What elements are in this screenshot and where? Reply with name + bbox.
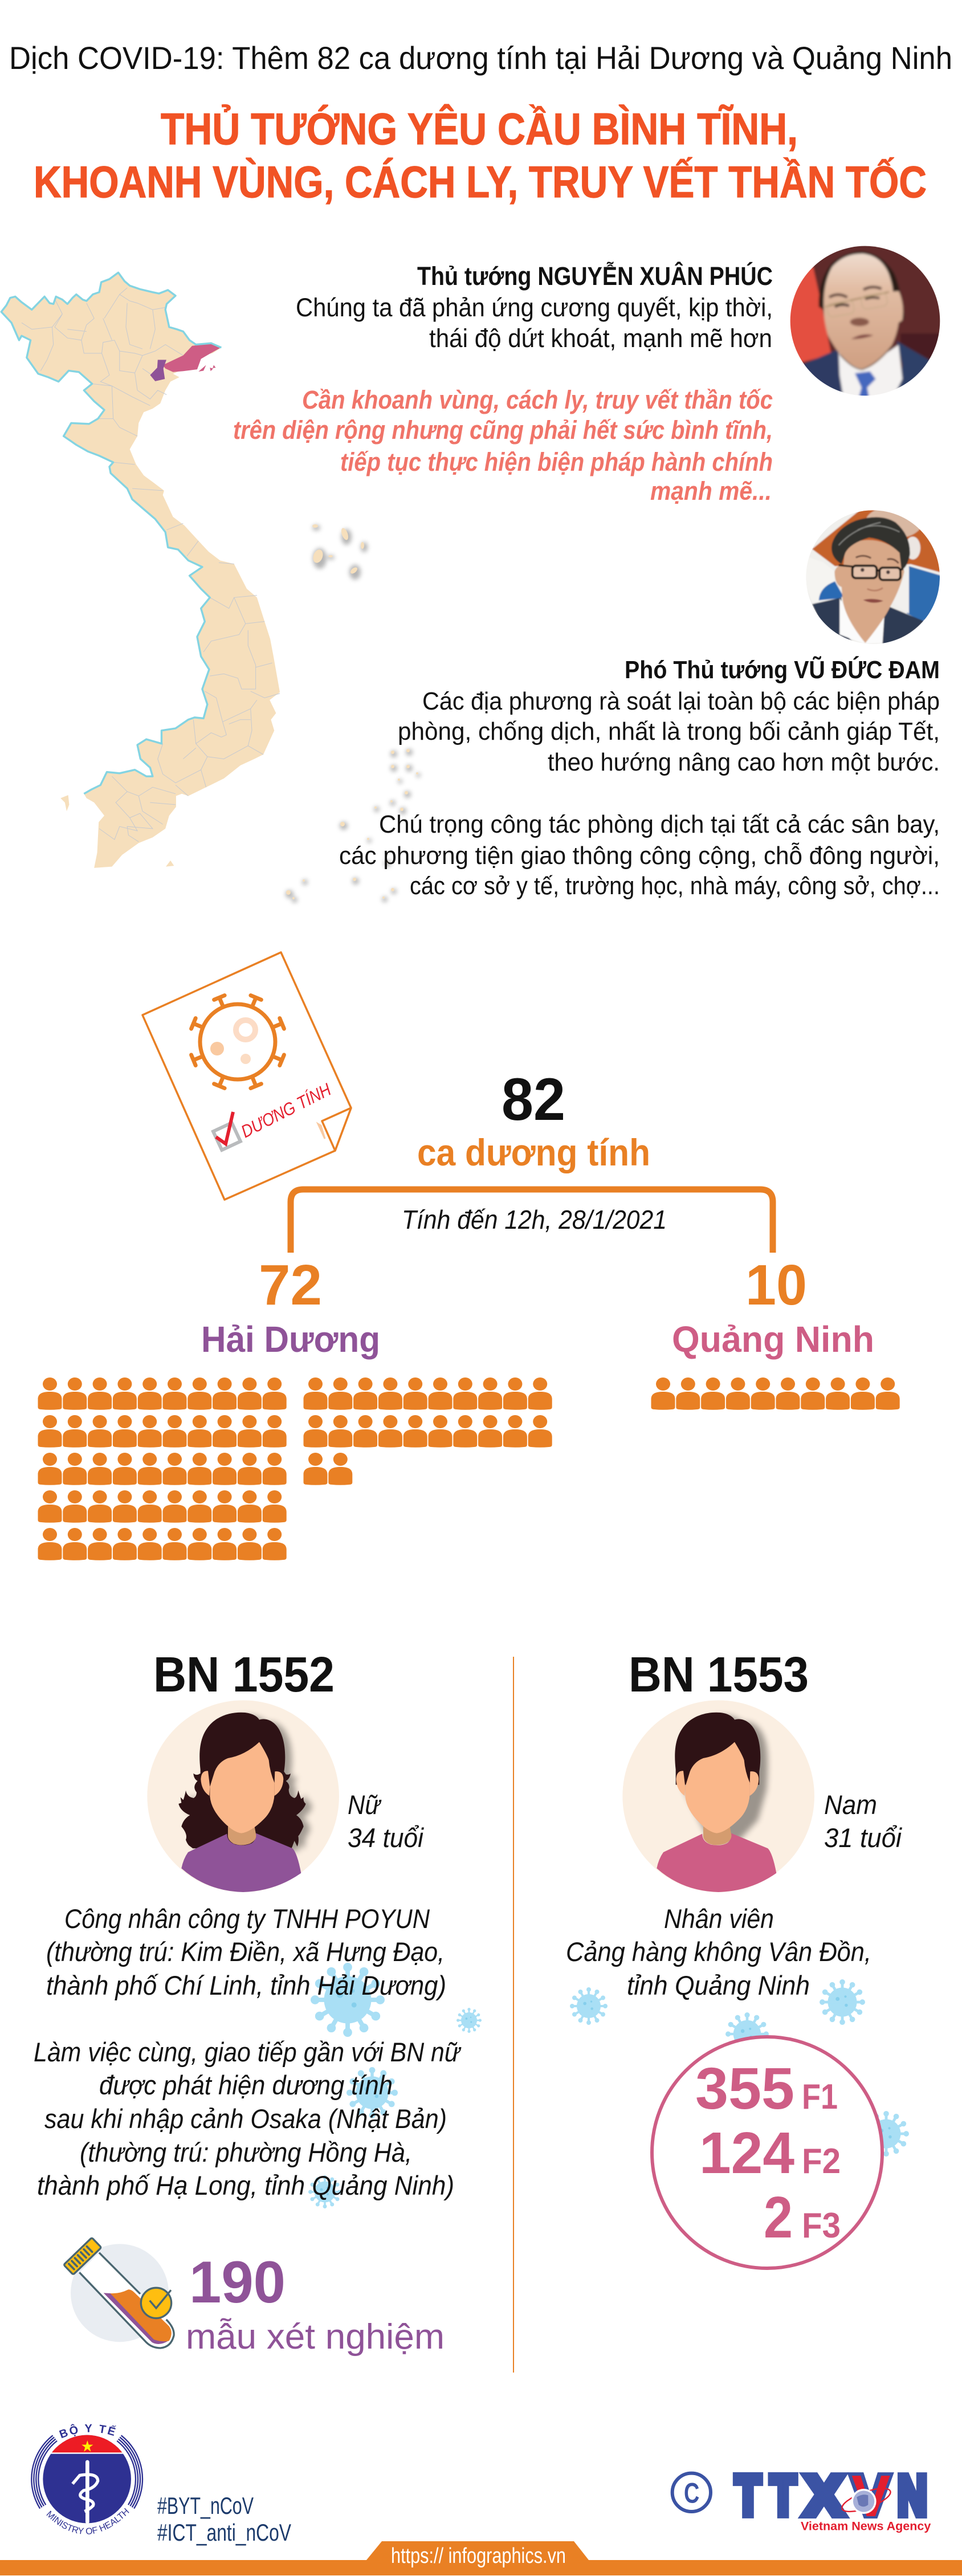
gender and age (824, 1790, 902, 1853)
occupation: (thường trú: Kim Điền, xã Hưng Đạo, (46, 1937, 445, 1967)
decorative viruses (308, 1963, 909, 2208)
icon: virus (191, 996, 284, 1088)
icon: test tube (64, 2237, 174, 2348)
map: Hai Duong highlighted (150, 360, 166, 381)
heading: BN 1552 (153, 1647, 335, 1702)
portrait: Vu Duc Dam (806, 510, 940, 644)
statement 1: Các địa phương rà soát lại toàn bộ các biện pháp (422, 687, 940, 715)
callout: contacts F1 F2 F3: F2 (802, 2142, 841, 2181)
quote: Prime Minister (233, 262, 773, 506)
heading: THỦ TƯỚNG YÊU CẦU BÌNH TĨNH, (161, 104, 798, 154)
exposure: (thường trú: phường Hồng Hà, (80, 2137, 412, 2167)
map: Quang Ninh highlighted (163, 343, 221, 372)
map: Phu Quoc and Con Dao islands (60, 795, 174, 867)
hashtags: #ICT_anti_nCoV (157, 2519, 291, 2546)
patient BN 1553 (566, 1647, 902, 2000)
highlighted quote: mạnh mẽ... (650, 476, 772, 506)
callout: contacts F1 F2 F3 (652, 2037, 882, 2268)
highlighted quote: Cần khoanh vùng, cách ly, truy vết thần tốc (302, 385, 773, 414)
statement 1: theo hướng nâng cao hơn một bước. (548, 748, 940, 776)
occupation (566, 1904, 871, 2000)
gender and age: Nữ (348, 1790, 382, 1820)
occupation: Nhân viên (664, 1904, 774, 1934)
statement 2 (339, 810, 940, 900)
map: Quang Ninh islets (198, 365, 216, 372)
logo: TTXVN: X (805, 2464, 843, 2526)
callout: contacts F1 F2 F3: 2 (764, 2184, 793, 2250)
count: Hai Duong: Hải Dương (201, 1319, 380, 1360)
occupation: Công nhân công ty TNHH POYUN (64, 1904, 430, 1934)
callout: contacts F1 F2 F3: F1 (802, 2077, 838, 2117)
gender and age: 34 tuổi (348, 1823, 424, 1853)
hashtags: #BYT_nCoV (157, 2492, 254, 2519)
map: land (1, 272, 280, 868)
logo: TTXVN: V (851, 2463, 890, 2529)
exposure (34, 2037, 462, 2200)
footer url: https:// infographics.vn (391, 2544, 566, 2568)
total: 82 positive cases: 82 (502, 1066, 565, 1133)
logo: TTXVN: T (771, 2464, 796, 2526)
avatar: woman (147, 1700, 339, 1892)
heading (34, 104, 927, 207)
gender and age (348, 1790, 424, 1853)
count: Quang Ninh: 10 (745, 1253, 807, 1317)
logo: TTXVN: V (852, 2464, 889, 2526)
exposure: Làm việc cùng, giao tiếp gần với BN nữ (34, 2037, 462, 2067)
highlighted quote: tiếp tục thực hiện biện pháp hành chính (340, 447, 773, 476)
exposure: được phát hiện dương tính (99, 2070, 393, 2100)
pictogram: Quang Ninh 10 people (651, 1377, 900, 1410)
stat: 190 samples: mẫu xét nghiệm (186, 2317, 445, 2357)
islands: shadows (286, 525, 421, 903)
occupation (46, 1904, 446, 2000)
map: border (1, 272, 221, 794)
avatar: man (622, 1700, 814, 1892)
statement 1 (398, 687, 940, 776)
logo: TTXVN: Vietnam News Agency (801, 2519, 931, 2533)
quote: Deputy Prime Minister (339, 655, 940, 900)
logo: Ministry of Health: BỘ Y TẾ (59, 2424, 116, 2438)
logo: TTXVN (735, 2463, 931, 2533)
stat: 190 samples: 190 (189, 2249, 286, 2316)
logo: TTXVN: N (898, 2464, 927, 2526)
count: Quang Ninh (672, 1253, 874, 1360)
total: 82 positive cases: ca dương tính (417, 1131, 650, 1173)
occupation: thành phố Chí Linh, tỉnh Hải Dương) (46, 1970, 446, 2000)
map: province lines (22, 288, 280, 842)
icon: checkbox (213, 1123, 240, 1150)
statement: Chúng ta đã phản ứng cương quyết, kịp thời, (296, 293, 773, 322)
highlighted quote (233, 385, 773, 506)
footer bar (0, 2541, 962, 2575)
logo: TTXVN: T (735, 2464, 761, 2526)
callout: contacts F1 F2 F3: F3 (802, 2206, 841, 2245)
label: positive: DƯƠNG TÍNH (238, 1079, 335, 1142)
count: Quang Ninh: Quảng Ninh (672, 1319, 874, 1360)
portrait: Nguyen Xuan Phuc (790, 246, 940, 396)
pictogram: Hai Duong 72 people (38, 1377, 552, 1560)
name: Thủ tướng NGUYỄN XUÂN PHÚC (417, 262, 773, 291)
count: Hai Duong: 72 (259, 1253, 322, 1317)
exposure: thành phố Hạ Long, tỉnh Quảng Ninh) (37, 2170, 454, 2200)
statement (296, 293, 773, 353)
logo: copyright (672, 2473, 711, 2512)
total: 82 positive cases (417, 1066, 650, 1173)
divider (513, 1657, 514, 2373)
statement 2: Chú trọng công tác phòng dịch tại tất cả các sân bay, (379, 810, 940, 838)
stat: 190 samples (186, 2249, 445, 2357)
occupation: Cảng hàng không Vân Đồn, (566, 1937, 871, 1967)
islands: land blobs (286, 524, 418, 899)
exposure: sau khi nhập cảnh Osaka (Nhật Bản) (44, 2104, 447, 2134)
hashtags (157, 2492, 291, 2546)
statement 2: các phương tiện giao thông công cộng, chỗ đông người, (339, 842, 940, 870)
patient BN 1552 (34, 1647, 462, 2200)
callout: contacts F1 F2 F3: 124 (699, 2120, 794, 2186)
date note: Tính đến 12h, 28/1/2021 (402, 1205, 667, 1234)
gender and age: 31 tuổi (824, 1823, 902, 1853)
statement: thái độ dứt khoát, mạnh mẽ hơn (429, 324, 772, 353)
occupation: tỉnh Quảng Ninh (627, 1970, 810, 2000)
count: Hai Duong (201, 1253, 380, 1360)
statement 1: phòng, chống dịch, nhất là trong bối cảnh giáp Tết, (398, 718, 940, 745)
logo: Ministry of Health: MINISTRY OF HEALTH (46, 2508, 129, 2534)
logo: copyright: C (684, 2477, 699, 2509)
highlighted quote: trên diện rộng nhưng cũng phải hết sức bình tĩnh, (233, 415, 773, 445)
icon: positive test document (142, 952, 351, 1200)
map of Vietnam (1, 272, 421, 903)
heading: BN 1553 (629, 1647, 809, 1702)
callout: contacts F1 F2 F3: 355 (695, 2056, 794, 2121)
bracket connector (291, 1189, 773, 1253)
gender and age: Nam (824, 1790, 877, 1820)
logo: Ministry of Health (31, 2424, 144, 2534)
